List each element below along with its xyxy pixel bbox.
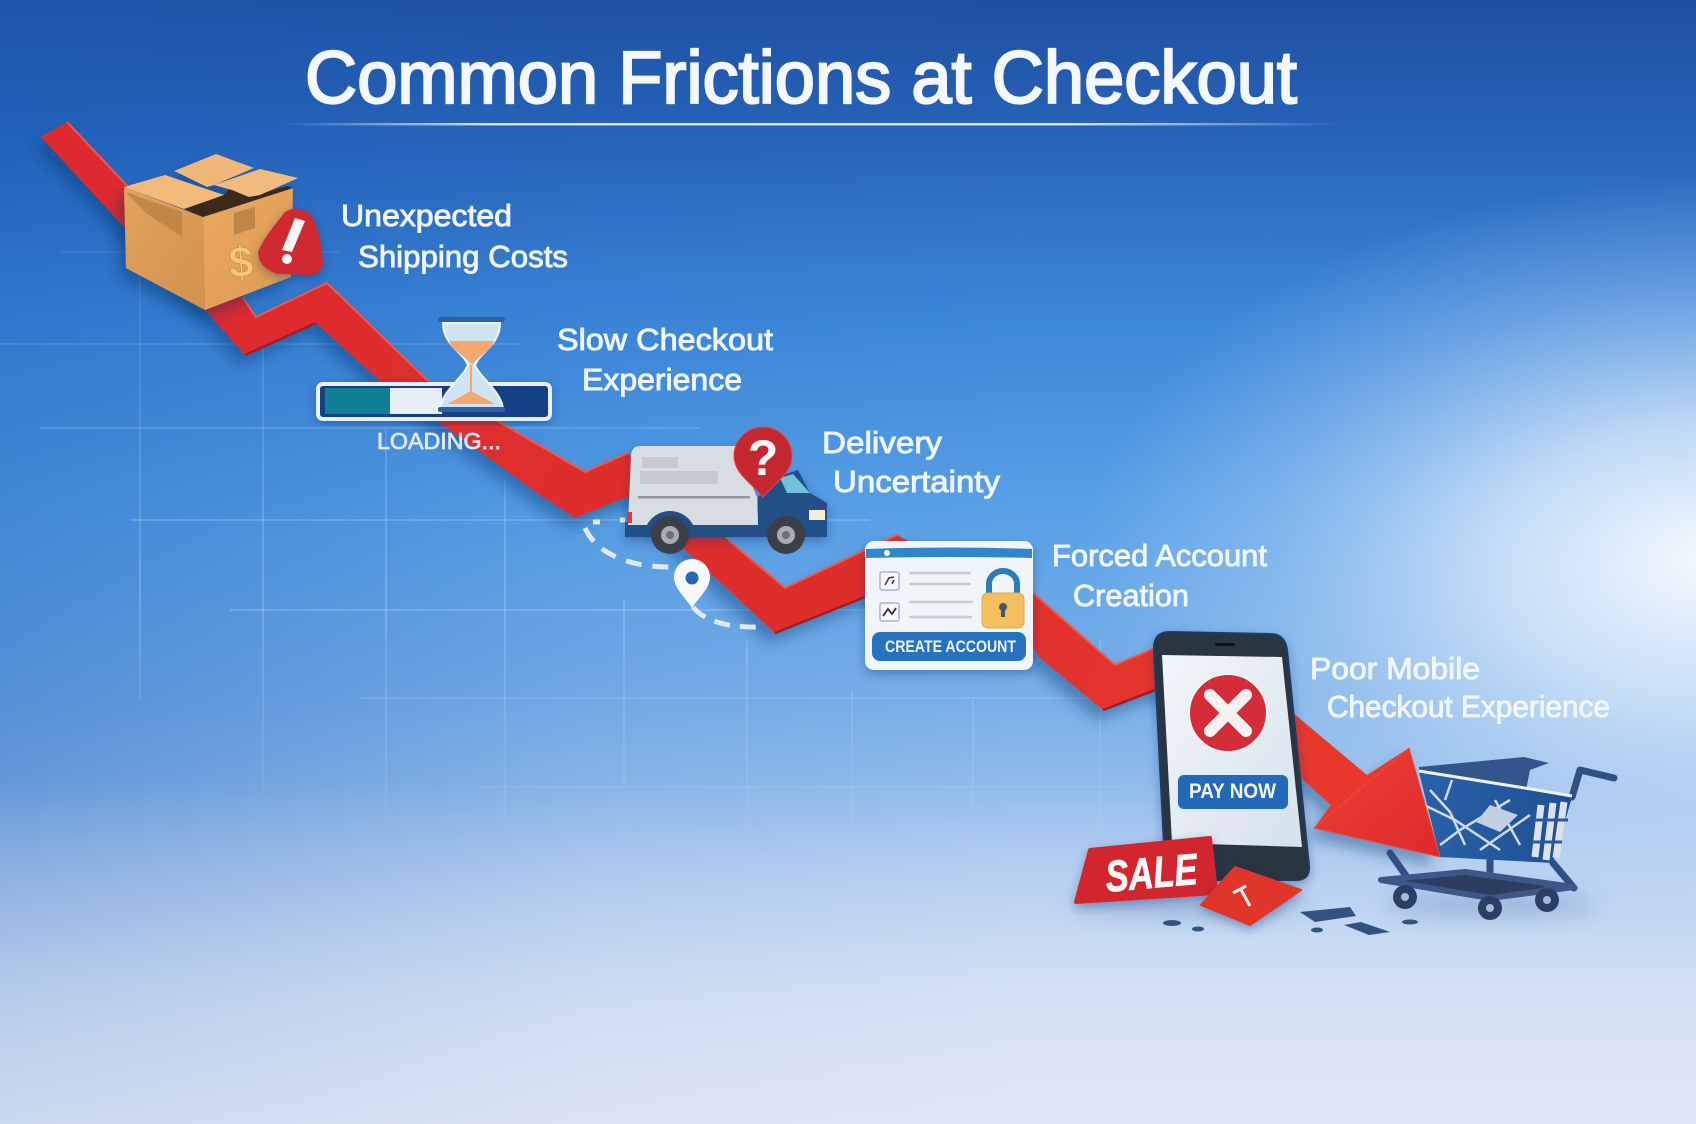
label: Unexpected Shipping Costs: Unexpected bbox=[341, 198, 512, 233]
icon: smartphone with payment error bbox=[1154, 632, 1309, 880]
ground shadows bbox=[1070, 895, 1600, 915]
label: Delivery Uncertainty bbox=[822, 425, 1001, 499]
loading caption: LOADING... bbox=[377, 428, 501, 454]
label: Poor Mobile Checkout Experience bbox=[1310, 651, 1610, 724]
icon: shipping box with alert: $ bbox=[227, 237, 255, 288]
icon: delivery van with question pin bbox=[625, 427, 827, 554]
icon: delivery van with question pin: ? bbox=[748, 430, 778, 486]
label: Poor Mobile Checkout Experience: Checkout Experience bbox=[1327, 689, 1610, 724]
label: Unexpected Shipping Costs bbox=[341, 198, 568, 274]
icon: smartphone with payment error: PAY NOW bbox=[1189, 780, 1276, 803]
icon: broken shopping cart bbox=[1381, 757, 1614, 920]
label: Poor Mobile Checkout Experience: Poor Mobile bbox=[1310, 651, 1480, 686]
background grid bbox=[0, 250, 1120, 840]
debris fragments bbox=[1163, 907, 1418, 935]
label: Slow Checkout Experience: Slow Checkout bbox=[557, 322, 773, 357]
label: Forced Account Creation bbox=[1052, 538, 1267, 613]
icon: create account card: CREATE ACCOUNT bbox=[885, 637, 1017, 656]
title underline bbox=[280, 123, 1340, 125]
icon: shipping box with alert bbox=[124, 154, 323, 310]
label: Delivery Uncertainty: Delivery bbox=[822, 425, 943, 460]
label: Forced Account Creation: Creation bbox=[1073, 578, 1189, 613]
icon: create account card bbox=[865, 541, 1033, 670]
icon: location pin bbox=[674, 559, 710, 608]
broken red tag piece bbox=[1201, 867, 1301, 925]
title: Common Frictions at Checkout bbox=[305, 36, 1297, 119]
label: Slow Checkout Experience bbox=[557, 322, 773, 397]
sale tag: SALE bbox=[1103, 845, 1201, 902]
icon: loading bar and hourglass bbox=[318, 317, 550, 419]
label: Slow Checkout Experience: Experience bbox=[582, 362, 742, 397]
label: Forced Account Creation: Forced Account bbox=[1052, 538, 1267, 573]
declining red arrow line bbox=[41, 122, 1440, 857]
dashed delivery route bbox=[585, 520, 762, 627]
label: Delivery Uncertainty: Uncertainty bbox=[833, 464, 1001, 499]
label: Unexpected Shipping Costs: Shipping Costs bbox=[358, 239, 568, 274]
red arrow head bbox=[1314, 748, 1440, 857]
